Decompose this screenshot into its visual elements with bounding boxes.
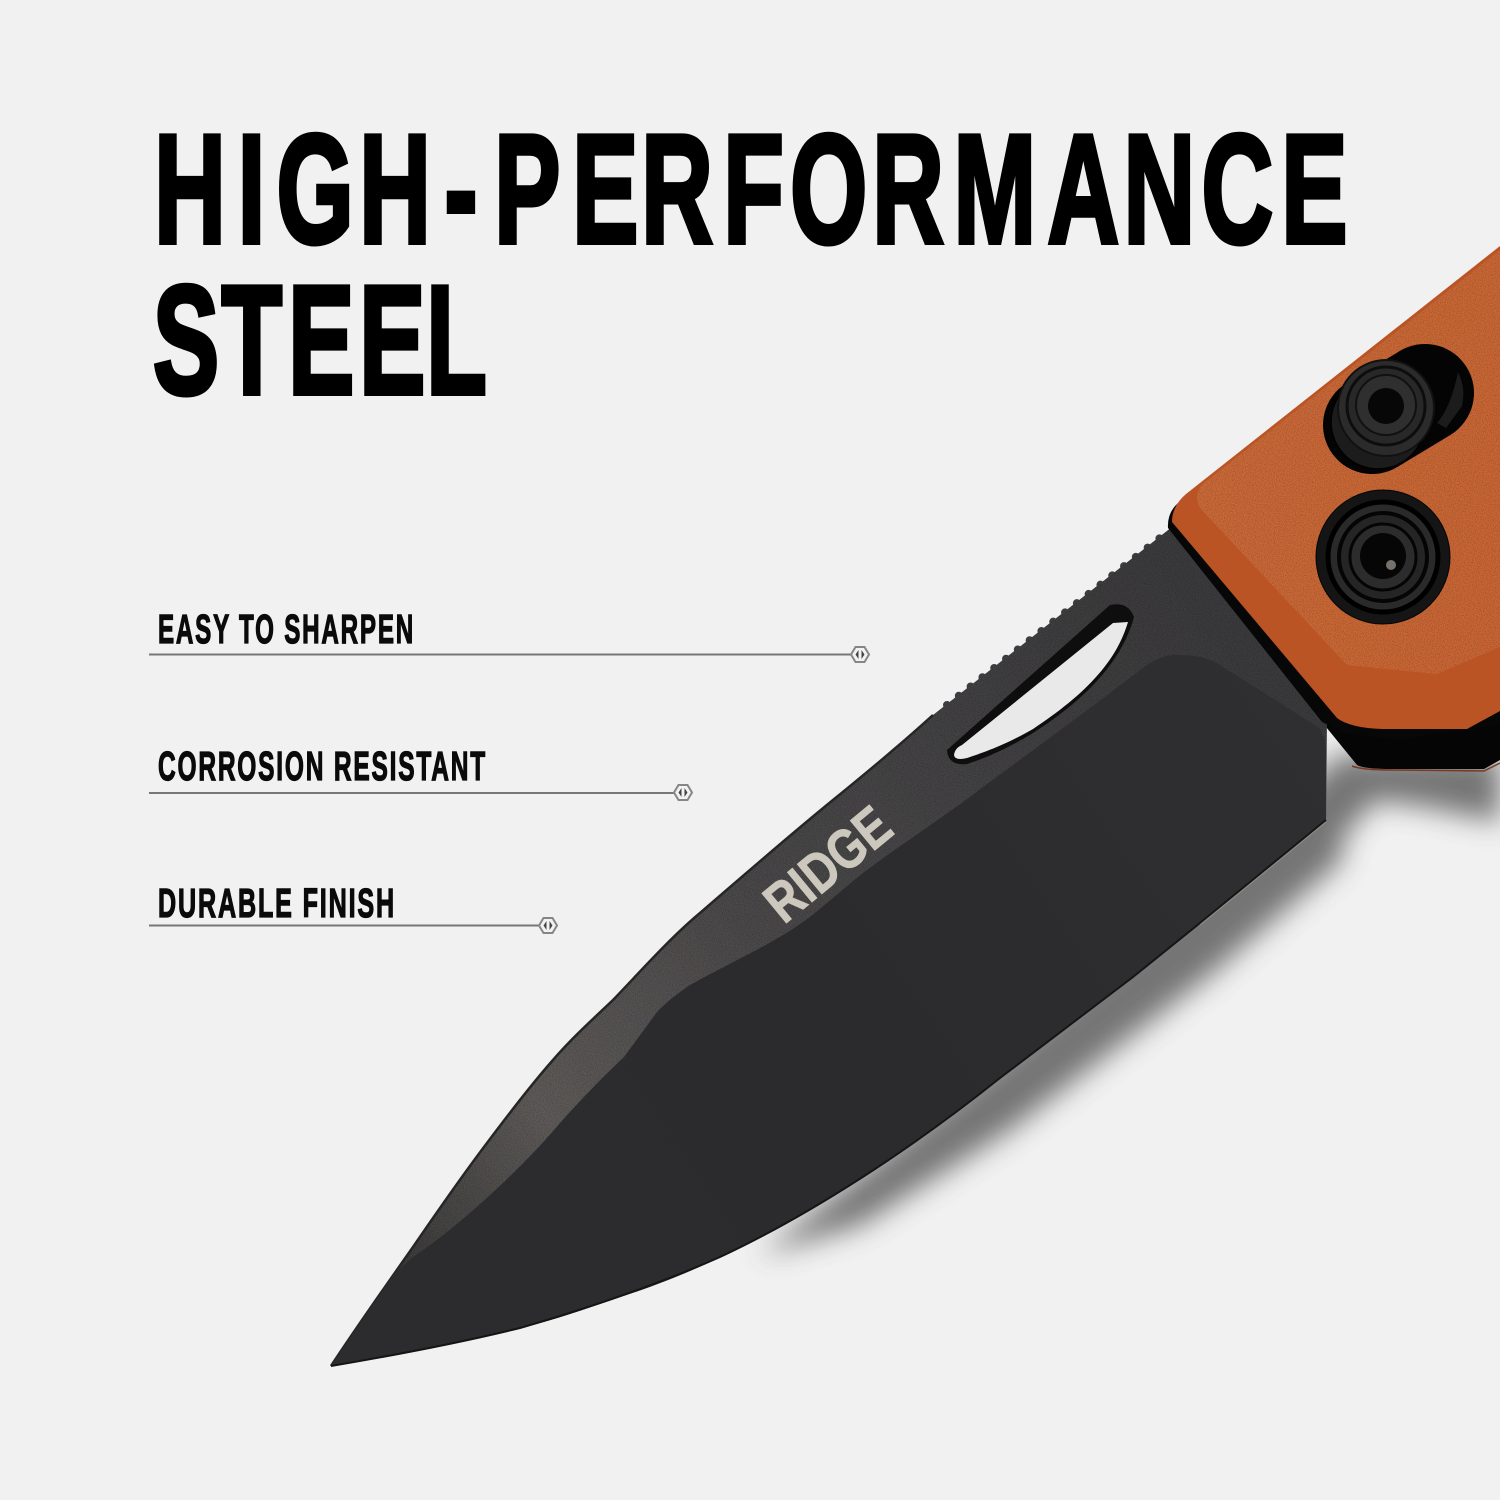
- title: STEEL: [153, 253, 487, 427]
- thumb hole: [947, 604, 1134, 764]
- logo: RIDGE: RIDGE: [752, 793, 904, 934]
- blade: [331, 527, 1327, 1366]
- upper screw: [1331, 360, 1434, 469]
- handle bevel: [1172, 246, 1500, 729]
- callout: easy to sharpen: [149, 606, 869, 662]
- upper slot: [1372, 393, 1425, 425]
- cutting edge: [331, 820, 1326, 1366]
- spine edge: [331, 715, 933, 1366]
- title: HIGH-PERFORMANCE: [154, 102, 1347, 276]
- handle underside: [1322, 700, 1500, 769]
- handle face: [1197, 250, 1500, 674]
- title: [153, 102, 1347, 427]
- handle: [1168, 246, 1500, 740]
- handle shadow line: [1168, 503, 1500, 740]
- callout: easy to sharpen: EASY TO SHARPEN: [158, 606, 415, 652]
- callout: corrosion resistant: CORROSION RESISTANT: [158, 743, 487, 789]
- cast shadows: [760, 755, 1500, 1255]
- callout: durable finish: DURABLE FINISH: [158, 880, 396, 926]
- knife illustration: [331, 246, 1500, 1366]
- flat grind: [331, 655, 1326, 1366]
- spine serrations: [947, 534, 1165, 705]
- blade body: [331, 527, 1327, 1366]
- lower screw: [1316, 490, 1450, 624]
